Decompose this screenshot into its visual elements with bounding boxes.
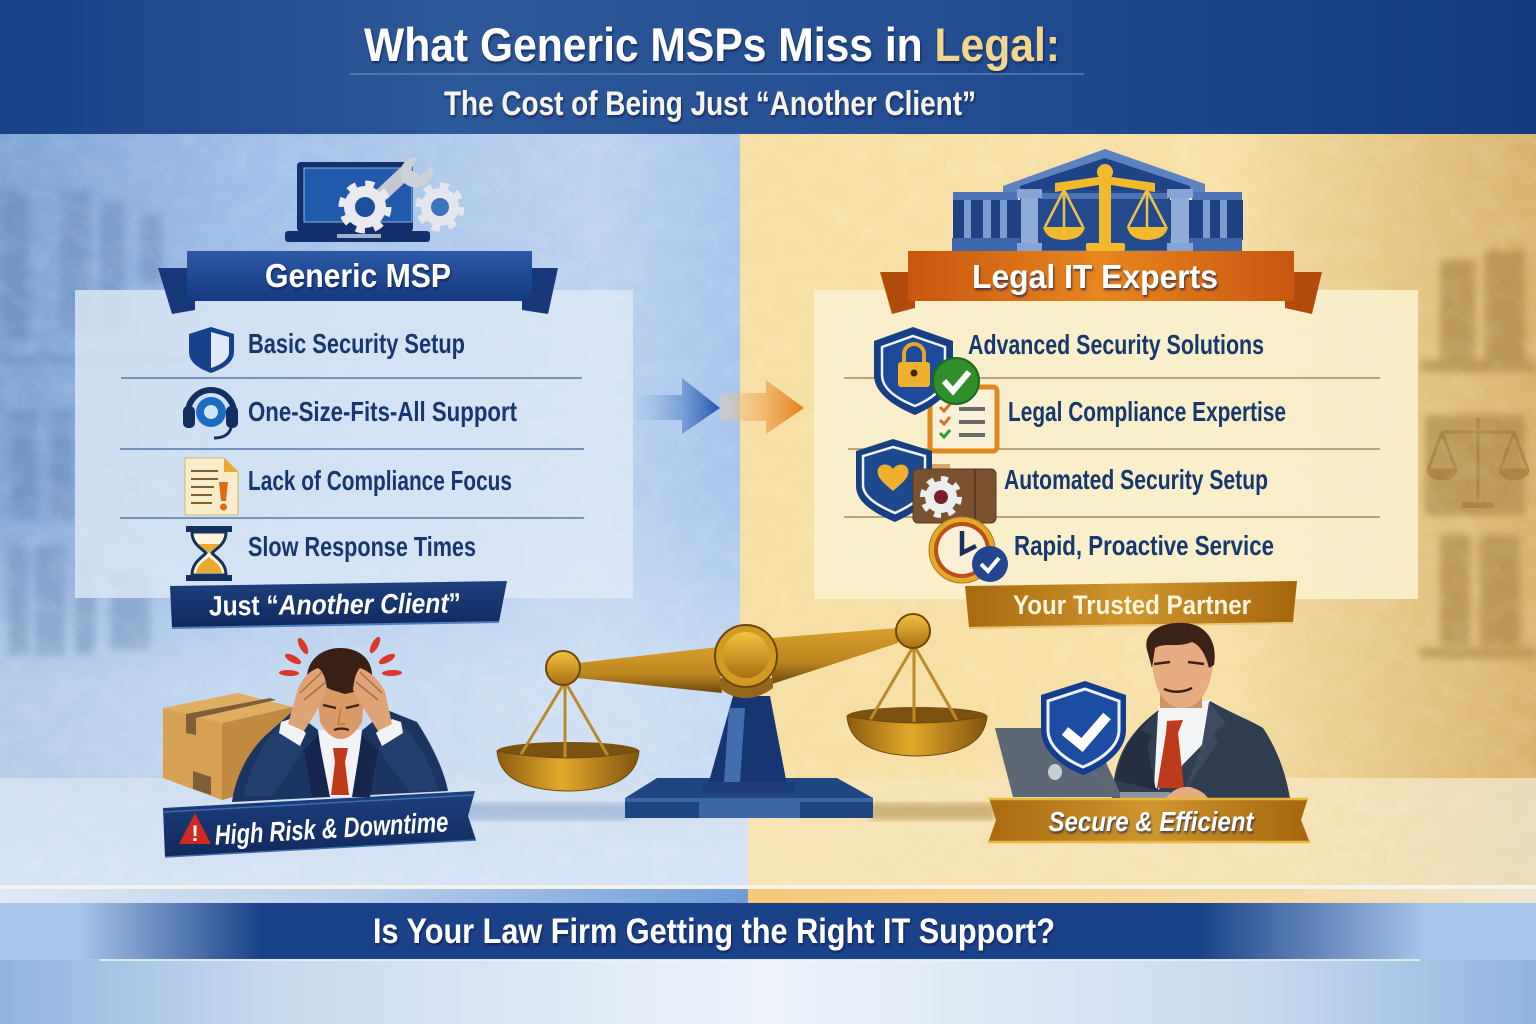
icon: warning: ! [191,821,199,846]
background: mottled texture [0,133,1536,885]
neck and face [317,688,365,739]
sleeves [244,724,304,796]
shield [1041,681,1126,775]
floor shadow: right [870,803,995,820]
ribbon: Legal IT Experts: Legal IT Experts [972,258,1218,295]
item: response: Slow Response Times [248,531,476,562]
ribbon: Legal IT Experts [880,251,1322,314]
icon: headset [183,390,238,438]
floor: right [748,778,1536,888]
label: Your Trusted Partner: Your Trusted Partner [1013,590,1251,620]
stress marks [279,635,402,676]
item: support: One-Size-Fits-All Support [248,396,517,427]
header band [0,0,1536,134]
item: basic security: Basic Security Setup [248,328,465,359]
jacket [1112,701,1290,798]
shirt [1158,700,1210,790]
background: right gold panel [740,133,1536,893]
floor: left [0,778,748,888]
figure: stressed businessman with box [163,635,448,802]
icon: shield [189,327,234,373]
item: rapid service: Rapid, Proactive Service [1014,530,1274,561]
bottom question: Is Your Law Firm Getting the Right IT Support? [373,912,1055,951]
bottom area [0,885,1536,1024]
scale beam [578,647,722,693]
box [163,693,293,800]
icon: hourglass [186,526,232,581]
icon: courthouse with scales [952,149,1243,251]
label: Your Trusted Partner [965,581,1297,628]
right strings and pan [847,614,987,756]
panel: generic MSP list [75,290,633,598]
item: advanced security: Advanced Security Solutions [968,329,1264,360]
label: Secure & Efficient: Secure & Efficient [1048,806,1255,837]
background: right bookshelves [1420,250,1536,658]
ribbon: Generic MSP [158,251,558,314]
scale base [625,778,873,818]
background: left lower glow [0,133,740,783]
background: faint scale on right shelf [1428,418,1528,505]
label: High Risk & Downtime [163,791,476,857]
neck and face [1160,680,1202,708]
item: automated security: Automated Security Setup [1004,464,1268,495]
laptop [995,728,1122,797]
item: compliance: Lack of Compliance Focus [248,465,512,496]
label: Just Another Client: Just “Another Client” [209,587,461,622]
hand [1166,787,1208,798]
face details [323,705,359,730]
tie [331,748,349,795]
icon: laptop with gears [285,157,461,242]
panel: legal IT experts list [814,290,1418,599]
jacket [232,710,448,802]
icon: compliance checklist [930,387,997,451]
ribbon: Generic MSP: Generic MSP [265,257,451,294]
background: left blue panel [0,133,748,893]
floor shadow: left [300,803,630,820]
scale hub [720,678,773,698]
title: What Generic MSPs Miss in Legal: [364,18,1060,71]
hands [288,668,327,731]
icon: shield with heart [856,439,932,522]
item: legal compliance: Legal Compliance Expertise [1008,396,1286,427]
scale pillar [708,696,787,785]
background: left bookshelves [0,190,190,655]
icon: document warning [185,458,238,515]
icon: briefcase with gear [913,464,996,523]
central balance scale [497,614,987,818]
subtitle: The Cost of Being Just “Another Client” [444,85,976,123]
arrow: blue [636,378,720,434]
figure: confident businessman with laptop [995,623,1290,798]
hair [307,648,372,694]
label: High Risk & Downtime: High Risk & Downtime [214,806,449,851]
arrow: orange [720,380,804,434]
left strings and pan [497,651,639,791]
icon: clock with check [929,517,1008,583]
cuffs [279,719,306,746]
lapels [1115,710,1160,790]
tie [1157,720,1184,788]
label: Secure & Efficient [988,798,1310,843]
label: Just Another Client [170,581,507,628]
icon: shield with padlock and check [874,327,979,415]
icon: warning [179,813,211,846]
